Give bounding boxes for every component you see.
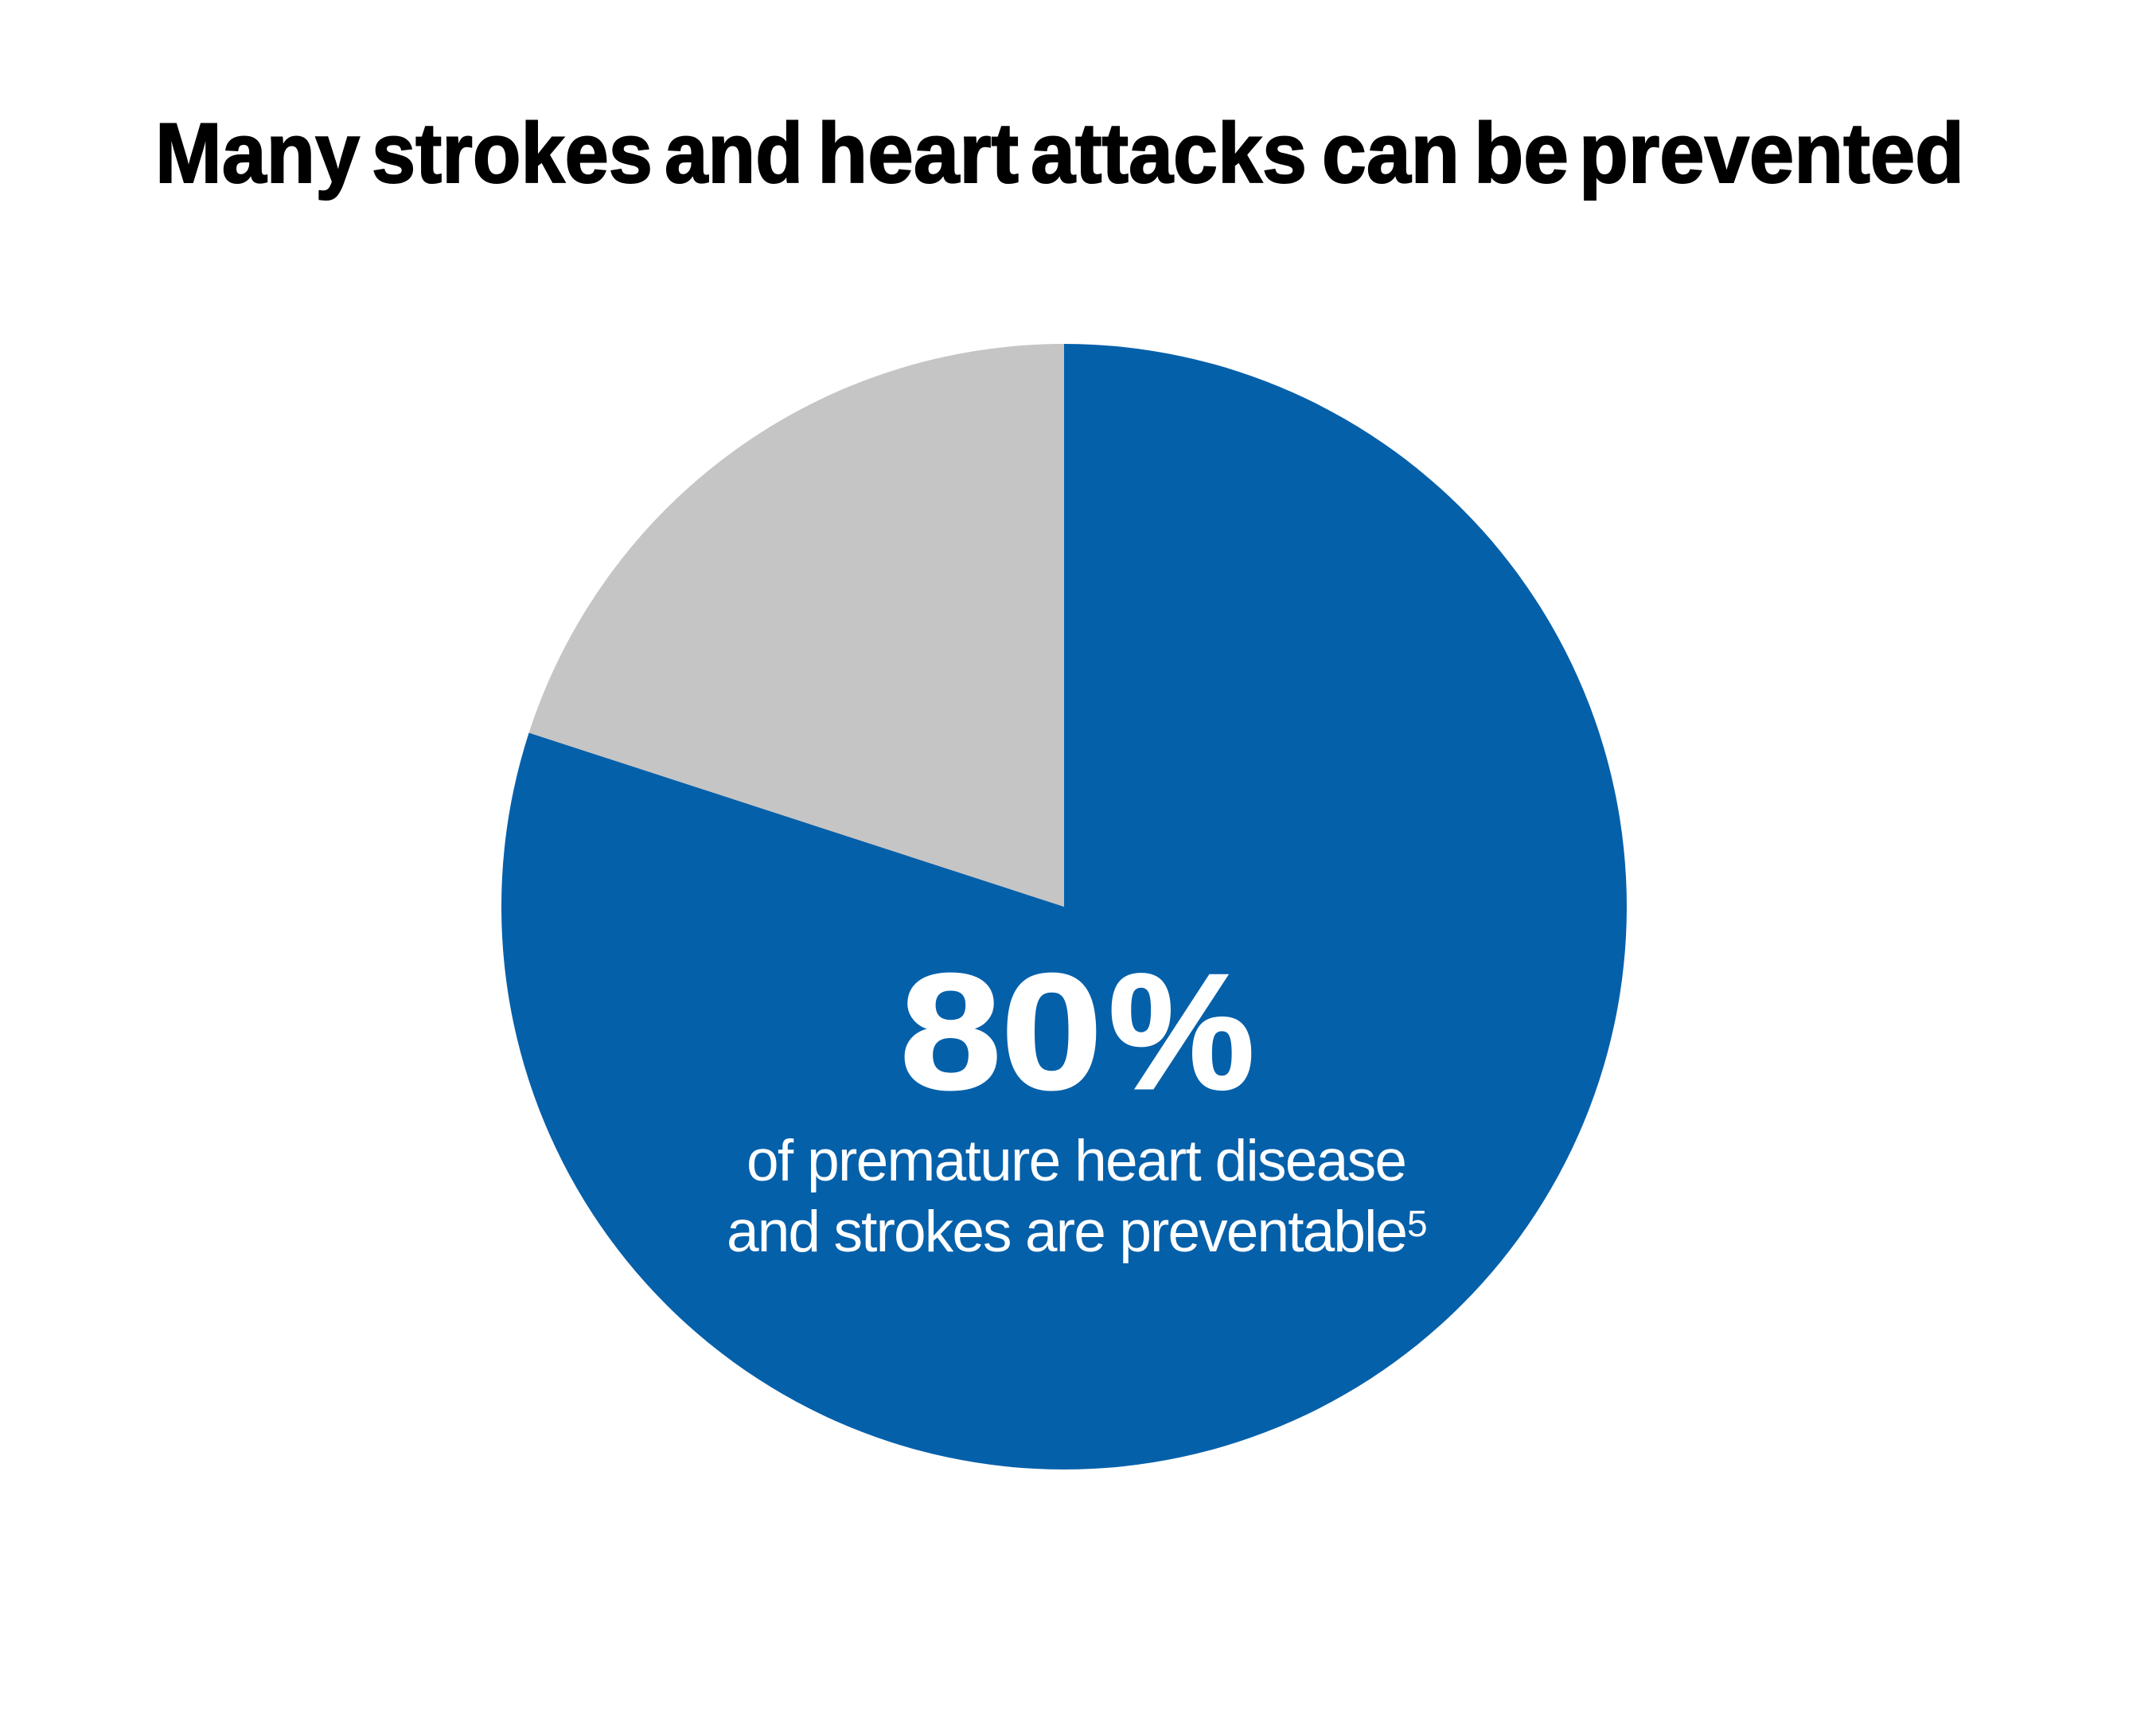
footnote marker: 5 — [1407, 1203, 1428, 1244]
title — [155, 105, 1964, 201]
title: be — [1474, 105, 1569, 201]
title: attacks — [1031, 105, 1307, 201]
statistic: 80%: 80 — [900, 940, 1102, 1123]
title: and — [665, 105, 803, 201]
description text — [727, 1129, 1428, 1264]
description line 2: and strokes are preventable — [727, 1200, 1408, 1264]
title: can — [1322, 105, 1460, 201]
title: strokes — [372, 105, 653, 201]
pie slice: preventable 80% — [501, 344, 1627, 1469]
statistic: 80%: % — [1109, 940, 1254, 1123]
title: Many — [155, 105, 360, 201]
pie slice: remaining 20% — [529, 344, 1064, 907]
title: prevented — [1579, 105, 1964, 201]
description line 1: of premature heart disease — [747, 1129, 1407, 1193]
pie chart — [501, 344, 1627, 1469]
title: heart — [817, 105, 1019, 201]
